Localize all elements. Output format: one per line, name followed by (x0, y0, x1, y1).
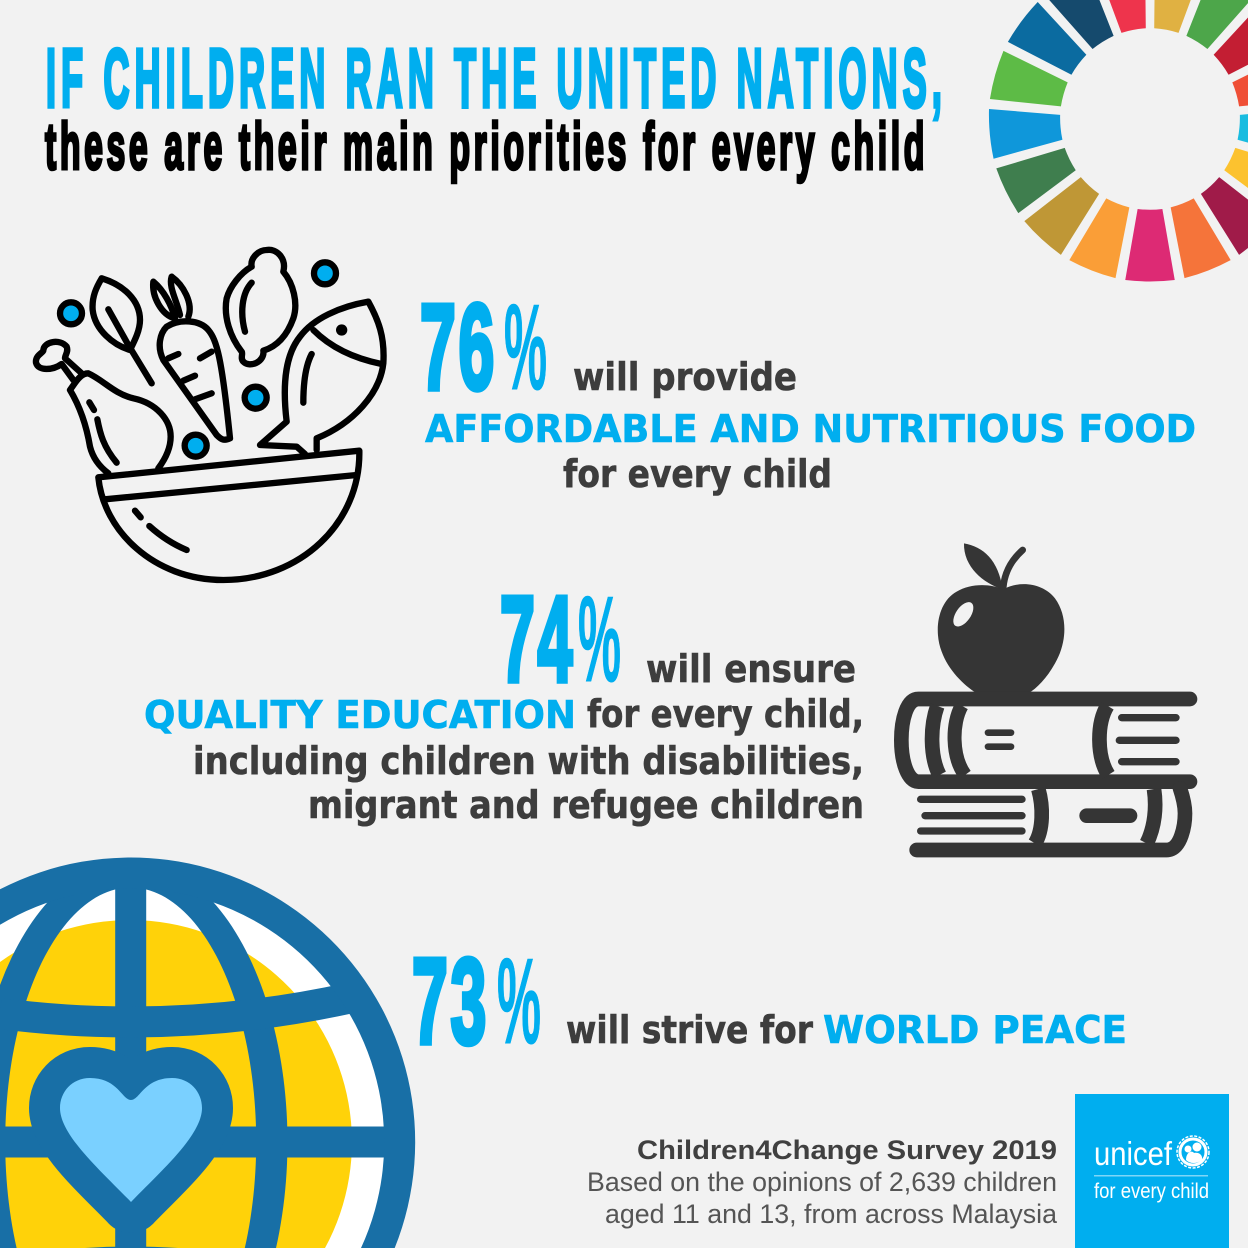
icon: food bowl (36, 250, 384, 580)
title (45, 32, 947, 183)
bottom book (917, 788, 1185, 850)
fish (260, 302, 384, 454)
carrot (153, 277, 230, 440)
figure 74%: 74 (500, 571, 575, 707)
blue dots (60, 262, 336, 457)
stat: 76 percent food: will provide (573, 355, 797, 399)
stat: 76 percent food: for every child (563, 452, 832, 496)
survey source note (587, 1135, 1058, 1229)
apple (938, 543, 1064, 693)
bowl (98, 451, 359, 580)
drumstick (36, 342, 171, 473)
unicef logo: unicef (1094, 1135, 1173, 1172)
stat: 76 percent food (420, 279, 1196, 496)
unicef logo (1075, 1094, 1229, 1248)
stat: 74 percent education: including children with disabilities, (193, 739, 864, 783)
stat: 74 percent education: migrant and refugee children (308, 783, 864, 827)
icon: apple on books (901, 543, 1190, 850)
stat: 76 percent food: % (504, 279, 547, 415)
emblem (1177, 1136, 1209, 1168)
stat: 74 percent education (144, 571, 864, 827)
stat: 73 percent peace: % (497, 933, 541, 1069)
leaf (93, 278, 152, 383)
stat: 74 percent education: QUALITY EDUCATION (144, 693, 576, 737)
unicef logo: for every child (1094, 1180, 1209, 1203)
figure 73%: 73 (412, 933, 489, 1069)
icon: SDG colour wheel (988, 0, 1248, 282)
stat: 73 percent peace (412, 933, 1127, 1069)
survey source note: Children4Change Survey 2019 (637, 1135, 1057, 1165)
survey source note: Based on the opinions of 2,639 children (587, 1167, 1057, 1197)
icon: globe with heart (0, 858, 415, 1248)
stat: 76 percent food: AFFORDABLE AND NUTRITIOUS FOOD (425, 407, 1196, 451)
lemon (226, 250, 295, 364)
stat: 74 percent education: for every child, (587, 692, 864, 736)
figure 76%: 76 (420, 279, 497, 415)
survey source note: aged 11 and 13, from across Malaysia (605, 1199, 1058, 1229)
top book (901, 699, 1190, 782)
heart (60, 1078, 202, 1202)
stat: 73 percent peace: will strive for (566, 1008, 813, 1052)
stat: 74 percent education: % (578, 571, 621, 707)
stat: 74 percent education: will ensure (646, 647, 856, 691)
stat: 73 percent peace: WORLD PEACE (823, 1008, 1127, 1052)
